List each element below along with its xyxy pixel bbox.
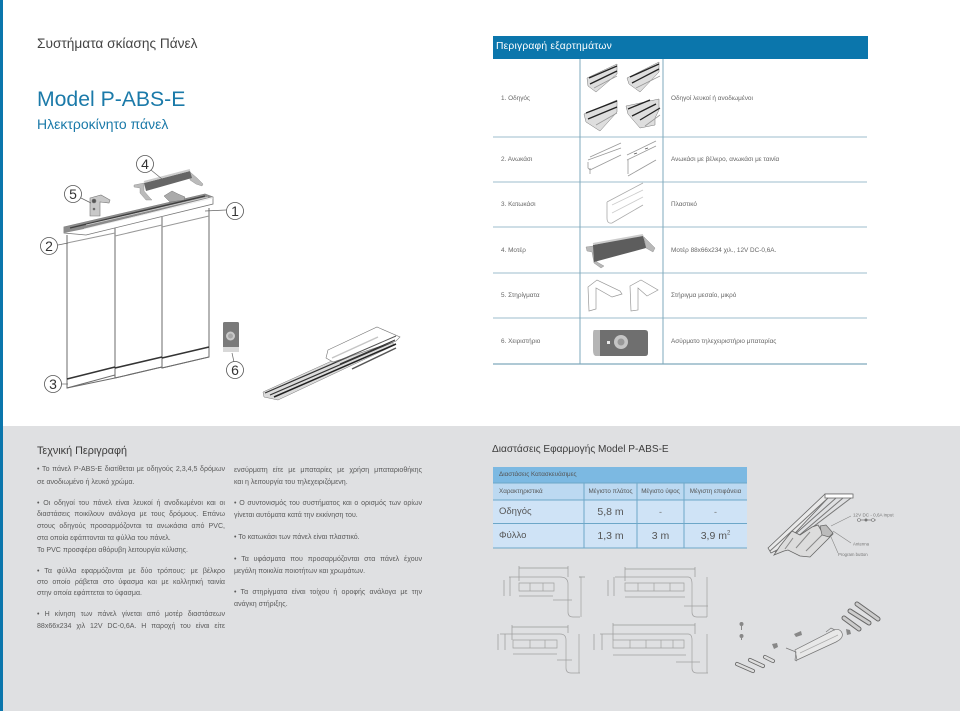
dimensions table text: 5,8 m [597,506,624,518]
technical description text, column 1 [37,465,225,630]
part image: carrier profiles [588,141,656,176]
part image: remote control [593,330,648,356]
bullet 2: • Οι οδηγοί του πάνελ είναι λευκοί ή ανοδιωμένοι και οι [37,500,225,507]
dimensions table text: 3 m [652,530,669,542]
part image: mounting brackets [588,280,658,311]
parts table labels: Πλαστικό [671,201,697,208]
dimensions table text [499,471,741,542]
bullet 1: • Το πάνελ P-ABS-E διατίθεται με οδηγούς 2,3,4,5 δρόμων [37,466,225,473]
rail assembly illustration [263,327,400,400]
parts table labels [501,95,779,345]
part image: plastic bottom profile [607,183,643,223]
small hardware [740,622,851,649]
operating mechanism illustration with labels [768,494,894,557]
heading: technical description: Τεχνική Περιγραφή [37,445,127,457]
rail cross-section: 3 track [608,567,708,617]
bullet 6: • Το κατωκάσι των πάνελ είναι πλαστικό. [234,534,360,541]
bracket [90,195,110,216]
column headers: Χαρακτηριστικά [499,488,543,495]
exploded parts illustration [737,604,878,671]
callout 2 [40,238,68,254]
row 6: 6. Χειριστήριο [501,338,540,345]
technical description text, column 1: διαστάσεις ποικίλουν ανάλογα με τους δρόμους. Επάνω [37,511,225,518]
dimensions table text: 1,3 m [597,530,624,542]
bullet 3: • Τα φύλλα εφαρμόζονται με δύο τρόπους: με βέλκρο [37,568,225,575]
technical description text, column 2: ανάγκη στήριξης. [234,601,288,608]
part image: motor [586,235,655,268]
technical description text, column 1: στους οδηγούς προσαρμόζονται τα ανωκάσια από PVC, [37,523,225,530]
callout 3: 3 [49,376,57,392]
clips [737,657,773,671]
row 4: 4. Μοτέρ [501,247,526,254]
parts table header [493,36,868,59]
operating mechanism illustration with labels: Antenna [853,542,870,546]
callout 4: 4 [141,156,149,172]
technical description text, column 1: σε ανοδιωμένο ή λευκό χρώμα. [37,479,135,486]
row 1: 1. Οδηγός [501,95,530,102]
title block [37,36,198,132]
heading: application dimensions: Διαστάσεις Εφαρμογής Model P-ABS-E [492,444,669,455]
dimensions table text: Μέγιστο πλάτος [588,488,633,495]
parts table grid [493,59,867,364]
callout 3 [44,376,68,392]
technical description text, column 1: Το PVC προσφέρει αθόρυβη λειτουργία κύλισης. [37,547,188,554]
callout 5: 5 [69,186,77,202]
bullet 7: • Τα υφάσματα που προσαρμόζονται στα πάνελ έχουν [234,556,422,563]
row 2: 2. Ανωκάσι [501,156,532,163]
technical description text, column 1: στα οποία εφάπτονται τα φύλλα του πάνελ. [37,535,171,542]
bullet 8: • Τα στηρίγματα είναι τοίχου ή οροφής ανάλογα με την [234,589,422,596]
part image: rails (four profiles) [584,62,660,131]
callout 6 [226,353,244,378]
technical description text, column 2: μεγάλη ποικιλία ποιοτήτων και χρωμάτων. [234,568,365,575]
dimensions table text: Μέγιστο ύψος [641,488,680,495]
table caption: Διαστάσεις Κατασκευάσιμες [499,471,577,478]
dimensions table fills [493,467,747,548]
rail cross-section: 4 track [498,625,580,673]
page title: Συστήματα σκίασης Πάνελ [37,36,197,51]
dimensions table text: - [659,507,662,517]
callout 1: 1 [231,203,239,219]
row: sheet: Φύλλο [499,530,526,541]
tubular motor [786,628,842,661]
parts table labels: Οδηγοί λευκοί ή ανοδιωμένοι [671,95,753,102]
parts table labels: Στήριγμα μεσαίο, μικρό [671,292,736,299]
callout 6: 6 [231,362,239,378]
parts table title: Περιγραφή εξαρτημάτων [496,41,612,52]
row 5: 5. Στηρίγματα [501,292,540,299]
technical description text, column 2: γίνεται αυτόματα κατά την εκκίνηση του. [234,512,358,519]
continued bullet 4: ενσύρματη είτε με μπαταρίες με χρήση μπαταριοθήκης [234,467,422,474]
remote control [223,322,239,352]
callout 2: 2 [45,238,53,254]
panel fabric sheets [67,208,209,388]
page accent bar and grey band [0,426,960,711]
dimensions table text: - [714,507,717,517]
subtitle: Ηλεκτροκίνητο πάνελ [37,116,168,132]
operating mechanism illustration with labels: Program button [838,552,868,557]
parts table labels: Μοτέρ 88x66x234 χιλ., 12V DC-0,6A. [671,247,776,254]
model name: Model P-ABS-E [37,88,185,111]
row: rail: Οδηγός [499,506,532,517]
bullet 4: • Η κίνηση των πάνελ γίνεται από μοτέρ διαστάσεων [37,611,225,618]
operating mechanism illustration with labels: 12V DC - 0,6A input [853,512,894,518]
row 3: 3. Κατωκάσι [501,201,536,208]
rail cross-section: 5 track [594,623,708,673]
parts table labels: Ανωκάσι με βέλκρο, ανωκάσι με ταινία [671,156,779,163]
rail cross-section: 2 track [504,566,585,617]
motor [134,170,203,202]
technical description text, column 1: στην οποία εφάπτεται το ύφασμα. [37,590,142,597]
technical description text, column 2 [234,466,422,608]
dimensions table text: Μέγιστη επιφάνεια [690,488,741,495]
parts table labels: Ασύρματο τηλεχειριστήριο μπαταρίας [671,338,776,345]
callout 4 [136,156,162,179]
callout 5 [64,186,91,203]
dimensions table text: 3,9 m2 [701,530,730,542]
lift arms [844,604,878,629]
technical description text, column 2: και η λειτουργία του τηλεχειριζόμενη. [234,479,348,486]
technical description text, column 1: 88x66x234 χιλ 12V DC-0,6A. Η παροχή του είναι είτε [37,623,225,630]
callout 1 [205,202,244,220]
headrail [64,194,213,235]
technical description text, column 1: στο οποίο ράβεται στο ύφασμα και με κολλητική ταινία [37,579,225,586]
bullet 5: • Ο συντονισμός του συστήματος και ο ορισμός των ορίων [234,500,422,507]
